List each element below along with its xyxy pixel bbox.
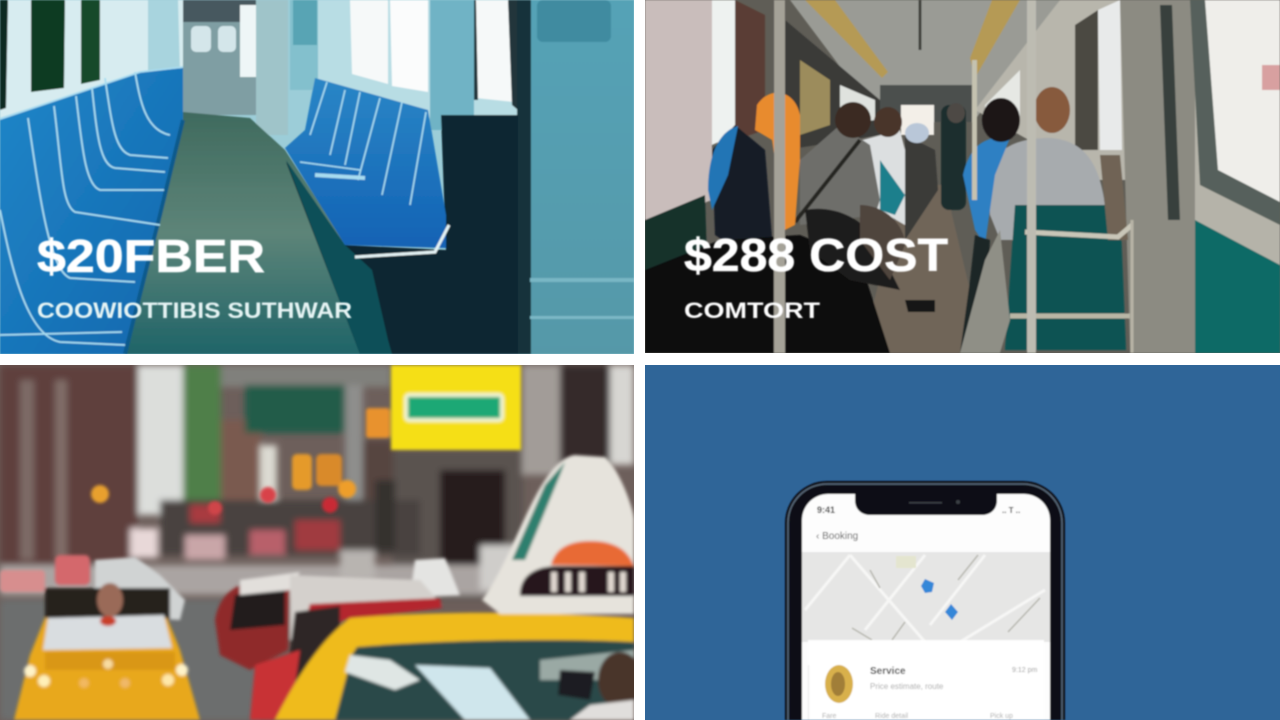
door panel [517,0,634,354]
seated man on right [988,138,1110,240]
aisle floor [126,112,360,354]
status bar time: 9:41 [817,505,835,515]
passenger in white [862,129,906,226]
vertical poles [774,0,785,353]
map marker two [945,604,958,620]
right wall [976,0,1126,181]
subway wall background [0,0,634,354]
ride card: Pick up [990,713,1013,720]
back arrow and title: ‹ Booking [816,531,858,542]
subheading: COMTORT [684,298,821,323]
smartphone [785,481,1065,720]
right window [1190,0,1280,225]
yellow taxi, near [275,613,642,720]
teal panel [1195,220,1280,353]
panel: empty subway car [0,0,634,354]
driver badge [825,665,853,703]
notch [855,490,997,515]
headline: $20FBER [37,230,265,282]
right windows [318,0,530,130]
street sign [391,365,521,450]
blue background [645,365,1280,720]
phone body [785,481,1065,720]
traffic lights [366,408,390,438]
distant cars [95,557,185,620]
teal seat [1005,205,1126,350]
footer labels: Fare [822,713,836,720]
seat rails [1025,225,1132,237]
aisle floor [872,184,970,353]
end doorway [901,105,934,135]
panel: taxis in city traffic [0,365,642,720]
ride card [808,640,1044,720]
ride card: Ride detail [875,713,909,720]
patterned seat edge [960,230,1010,353]
far end of the car [183,0,318,135]
ride detail: Price estimate, route [870,682,944,691]
map [802,552,1050,642]
left windows [0,0,183,125]
right seat rows [285,78,449,257]
dark foreground people [645,235,890,353]
driver name: Service [870,666,906,677]
status bar icons: .. T .. [1002,506,1020,515]
dark wall and seat base [286,115,518,354]
yellow taxi, far [14,583,200,720]
subheading: COOWIOTTIBIS SUTHWAR [37,298,352,323]
ride time: 9:12 pm [1012,667,1037,674]
phone screen [802,494,1050,720]
blurred street background [0,365,634,720]
headline: $288 COST [684,229,948,281]
far passengers [941,105,966,210]
door frames [1120,0,1195,353]
panel: ride-hailing phone app [645,365,1280,720]
taxi roof light [482,455,634,614]
orange scarf [755,93,800,230]
panel: crowded subway car [645,0,1280,353]
ceiling [790,0,1060,120]
passenger with blue bag [712,124,772,240]
blue jacket passenger [963,137,1010,245]
passenger with strap [800,125,880,225]
car interior base [645,0,1280,353]
map marker one [921,579,934,593]
left seat rows [0,67,183,354]
left wall [645,0,712,225]
